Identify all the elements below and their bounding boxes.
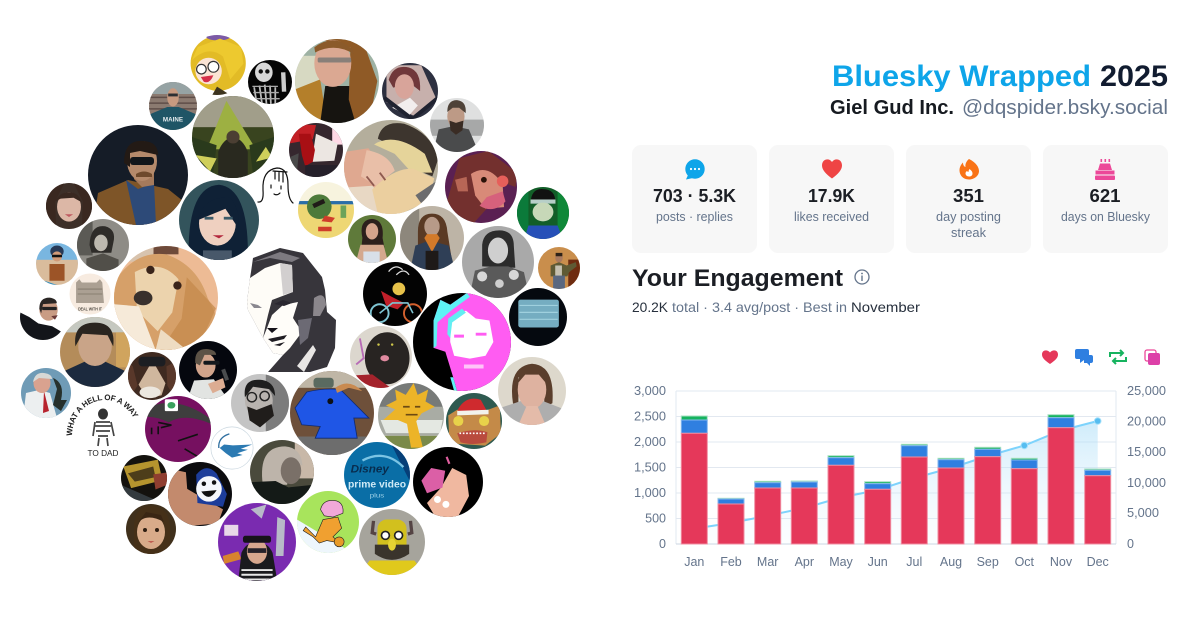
avatar: black and white flower shirt <box>462 226 534 298</box>
subtitle: display name and handle <box>830 97 1168 119</box>
avatar: cartoon with red mushroom <box>289 123 343 177</box>
avatar: bearded man in grey coat <box>430 98 484 152</box>
panel: posting streak: 351 <box>953 186 984 206</box>
avatar: purple cartoon with cap <box>145 396 211 462</box>
month labels: Mar <box>757 555 778 569</box>
left axis labels: 0 <box>659 537 666 551</box>
avatar: pusheen deal with it <box>70 274 110 314</box>
skeleton logo: what a hell of a way to dad: TO DAD <box>88 448 118 458</box>
month labels: Oct <box>1015 555 1035 569</box>
avatar: blonde cartoon with glasses <box>190 35 246 95</box>
avatar: orange cat with pink helmet <box>297 491 359 553</box>
avatar: dark-haired man smiling <box>60 317 130 387</box>
panel: days on Bluesky: days on Bluesky <box>1061 210 1151 224</box>
avatar: blonde woman hugging cat <box>344 120 438 214</box>
avatar: woman with tattoos in garden <box>348 215 396 263</box>
right axis labels: 20,000 <box>1127 414 1166 428</box>
left axis labels: 2,000 <box>634 435 666 449</box>
avatar: Disney prime video plus logo: Disney <box>351 463 390 475</box>
avatar: bearded man greyscale <box>231 374 289 432</box>
month labels: Sep <box>977 555 999 569</box>
icon: reposts legend <box>1110 350 1126 364</box>
chart: monthly engagement stacked bars with cumulative line <box>634 384 1166 569</box>
subtitle: display name and handle: @dqspider.bsky.social <box>962 97 1168 119</box>
avatar: man in Maine jersey: MAINE <box>163 116 184 123</box>
engagement summary <box>632 299 920 315</box>
central portrait: illustrated man <box>247 248 336 372</box>
avatar: catbus with santa hat <box>446 393 502 449</box>
avatar: man with sunglasses and brown jacket <box>88 125 188 225</box>
panel: likes received <box>769 145 894 253</box>
avatar: cartoon frog on beach <box>298 182 354 238</box>
icon: info <box>855 270 869 284</box>
avatar: black and white woman <box>77 219 129 271</box>
avatar: forest garden <box>192 96 274 178</box>
icon: birthday cake <box>1095 159 1115 180</box>
panel: likes received: 17.9K <box>808 186 855 206</box>
engagement summary: total · 3.4 avg/post · Best in <box>672 299 847 315</box>
avatar cluster <box>20 35 580 581</box>
avatar: purple collage woman <box>218 503 296 581</box>
avatar: black fluffy dog <box>350 326 412 388</box>
avatar: bearded mask figure <box>128 352 176 400</box>
right axis labels: 5,000 <box>1127 506 1159 520</box>
panel: posts and replies: posts · replies <box>656 210 733 224</box>
panel: likes received: likes received <box>794 210 869 224</box>
icon: heart <box>822 159 842 178</box>
avatar: dark yellow sign <box>121 455 167 501</box>
engagement summary: 20.2K <box>632 299 669 315</box>
engagement summary: November <box>851 299 920 315</box>
avatar: Disney prime video plus logo: prime video <box>348 480 406 491</box>
avatar: man in Maine jersey <box>149 82 197 130</box>
avatar: lion character <box>445 151 517 223</box>
title: Bluesky Wrapped 2025: 2025 <box>1100 60 1168 93</box>
panel: days on Bluesky: 621 <box>1090 186 1120 206</box>
skeleton logo: what a hell of a way to dad: WHAT A HELL OF A WAY <box>66 394 138 436</box>
month labels: May <box>829 555 854 569</box>
avatar: woman with dark blue hair <box>179 180 259 262</box>
avatar: skeleton <box>248 60 292 104</box>
heading: Your Engagement: Your Engagement <box>632 265 843 292</box>
avatar: man in jacket against wall <box>538 247 580 289</box>
avatar: spiky sun mascot at football <box>378 383 444 449</box>
grid lines <box>676 391 1116 544</box>
panel: posting streak <box>906 145 1031 253</box>
avatar: man with glasses and black coat <box>20 298 61 340</box>
left axis labels: 2,500 <box>634 410 666 424</box>
panel: posts and replies <box>632 145 757 253</box>
icon: quotes legend <box>1145 350 1160 365</box>
avatar: redhead with glasses <box>295 39 379 123</box>
month labels: Apr <box>795 555 814 569</box>
month labels: Jun <box>868 555 888 569</box>
avatar: young woman with brown hair <box>498 357 566 425</box>
skeleton logo: what a hell of a way to dad <box>66 394 138 458</box>
month labels: Jan <box>684 555 704 569</box>
avatar: pink pixel portrait <box>413 293 511 391</box>
left axis labels: 1,500 <box>634 460 666 474</box>
avatar: pink pig cartoon <box>413 447 483 517</box>
avatar: Disney prime video plus logo: plus <box>370 492 385 499</box>
panel: posting streak: day posting <box>936 210 1001 224</box>
avatar: person on beach <box>36 243 78 285</box>
cumulative line <box>694 421 1098 529</box>
icon: chat bubble <box>685 159 705 180</box>
avatar: skeleton rider on bicycle <box>363 262 427 326</box>
right axis labels: 10,000 <box>1127 476 1166 490</box>
month labels: Feb <box>720 555 742 569</box>
month labels <box>684 555 1109 569</box>
avatar: wing logo <box>210 426 254 470</box>
title: Bluesky Wrapped 2025: Bluesky Wrapped <box>832 60 1091 93</box>
subtitle: display name and handle: Giel Gud Inc. <box>830 97 954 119</box>
avatar: pusheen deal with it: DEAL WITH IT <box>78 306 102 311</box>
right axis labels: 0 <box>1127 537 1134 551</box>
avatar: blue goat cartoon <box>290 371 374 455</box>
right axis labels <box>1127 384 1166 551</box>
avatar: green anime character <box>517 187 569 239</box>
avatar: hand holding snowman toy <box>168 462 232 526</box>
avatar: Disney prime video plus logo <box>344 442 410 508</box>
left axis labels: 500 <box>645 512 666 526</box>
month labels: Jul <box>906 555 922 569</box>
right axis labels: 25,000 <box>1127 384 1166 398</box>
avatar: yellow horned ogre <box>359 509 425 575</box>
right axis labels: 15,000 <box>1127 445 1166 459</box>
month labels: Aug <box>940 555 962 569</box>
left axis labels <box>634 384 666 551</box>
line dots <box>1021 418 1101 449</box>
panel: posting streak: streak <box>951 226 987 240</box>
cumulative area <box>694 421 1098 544</box>
icon: flame <box>960 159 979 180</box>
left axis labels: 1,000 <box>634 486 666 500</box>
avatar: static television <box>509 288 567 346</box>
icon: likes legend <box>1042 350 1058 364</box>
bars <box>681 415 1111 544</box>
legend icons <box>1042 349 1160 366</box>
avatar: golden dog <box>114 246 218 350</box>
avatar: woman in car mirror <box>382 63 438 119</box>
avatar: long-haired person in denim <box>400 206 464 270</box>
avatar: blonde woman in dim light <box>250 440 314 504</box>
icon: replies legend <box>1075 349 1093 366</box>
left axis labels: 3,000 <box>634 384 666 398</box>
avatar: woman with bangs <box>46 183 92 229</box>
panel: days on Bluesky <box>1043 145 1168 253</box>
panel: posts and replies: 703 · 5.3K <box>653 186 736 206</box>
avatar: man in shades with microphone <box>179 341 237 399</box>
avatar: classic painting portrait <box>126 504 176 554</box>
avatar: older man on phone <box>21 368 71 418</box>
month labels: Nov <box>1050 555 1073 569</box>
month labels: Dec <box>1087 555 1109 569</box>
hand-drawn line face <box>258 168 293 203</box>
